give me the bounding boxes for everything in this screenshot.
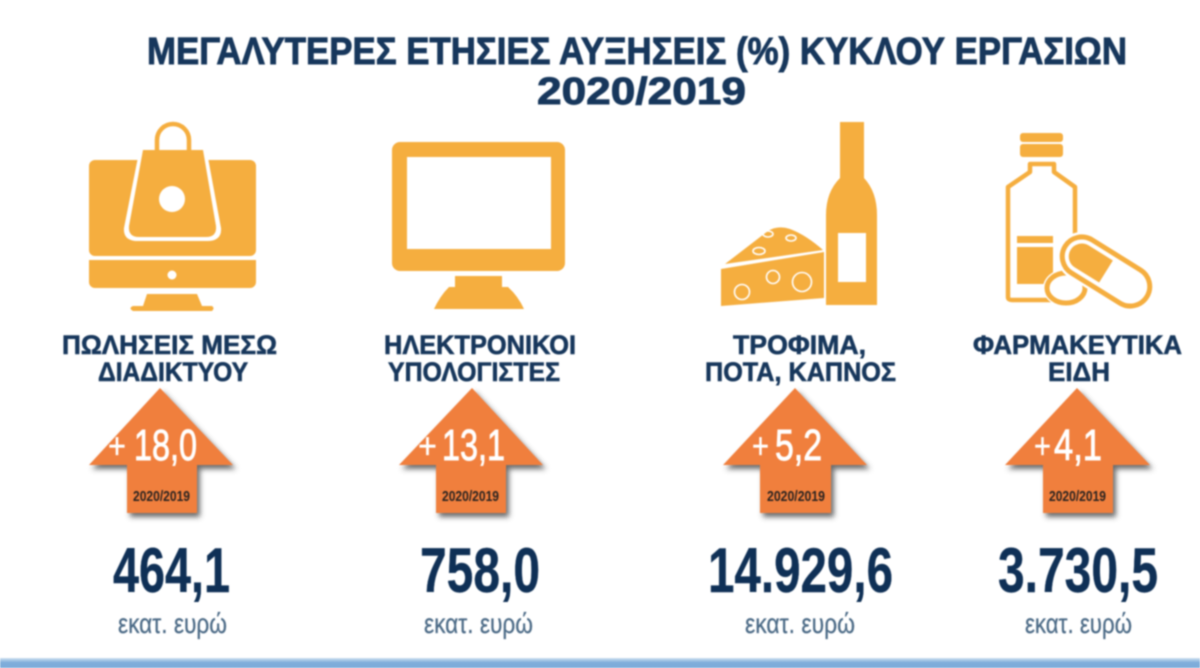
panel: online sales <box>62 124 277 639</box>
bottom blue band <box>0 658 1200 668</box>
arrow: +5,2: 5,2 <box>775 421 822 470</box>
panel: food, drinks, tobacco <box>705 122 896 639</box>
category label: ΕΙΔΗ <box>1048 357 1110 387</box>
icon: monitor with shopping bag <box>89 124 256 311</box>
category label <box>62 330 277 387</box>
unit: εκατ. ευρώ <box>424 608 533 639</box>
arrow: +18,0: 18,0 <box>134 421 197 470</box>
category label: ΤΡΟΦΙΜΑ, <box>733 330 866 360</box>
unit: εκατ. ευρώ <box>118 608 227 639</box>
category label <box>384 330 576 387</box>
arrow: +18,0: + <box>108 425 126 466</box>
arrow: +13,1: 13,1 <box>442 421 505 470</box>
unit: εκατ. ευρώ <box>745 608 855 639</box>
panel: pharmaceuticals <box>973 133 1182 639</box>
category label <box>705 330 896 387</box>
arrow: +5,2: 2020/2019 <box>767 488 825 505</box>
icon: computer monitor <box>392 142 565 309</box>
arrow: +5,2: + <box>752 425 769 466</box>
panel: computers <box>384 142 576 639</box>
arrow: +18,0 <box>89 388 233 513</box>
arrow: +13,1: 2020/2019 <box>442 488 499 505</box>
category label <box>973 330 1182 387</box>
title: 2020/2019 <box>537 71 746 113</box>
category label: ΥΠΟΛΟΓΙΣΤΕΣ <box>388 357 560 387</box>
icon: cheese and bottle <box>721 122 877 306</box>
value: 464,1 <box>113 536 230 606</box>
title: ΜΕΓΑΛΥΤΕΡΕΣ ΕΤΗΣΙΕΣ ΑΥΞΗΣΕΙΣ (%) ΚΥΚΛΟΥ ΕΡΓΑΣΙΩΝ <box>147 31 1127 73</box>
category label: ΠΩΛΗΣΕΙΣ ΜΕΣΩ <box>62 330 277 360</box>
arrow: +4,1: 4,1 <box>1054 421 1102 470</box>
category label: ΦΑΡΜΑΚΕΥΤΙΚΑ <box>973 330 1182 360</box>
arrow: +4,1 <box>1005 388 1150 513</box>
arrow: +4,1: 2020/2019 <box>1049 488 1106 505</box>
arrow: +13,1: + <box>418 425 437 466</box>
value: 14.929,6 <box>708 536 893 606</box>
arrow: +4,1: + <box>1034 425 1051 466</box>
category label: ΔΙΑΔΙΚΤΥΟΥ <box>98 357 248 387</box>
arrow: +5,2 <box>723 388 867 513</box>
arrow: +18,0: 2020/2019 <box>133 488 190 505</box>
title <box>147 31 1127 113</box>
category label: ΗΛΕΚΤΡΟΝΙΚΟΙ <box>384 330 576 360</box>
category label: ΠΟΤΑ, ΚΑΠΝΟΣ <box>705 357 896 387</box>
value: 758,0 <box>420 536 540 606</box>
icon: medicine bottle and pills <box>1008 133 1164 320</box>
arrow: +13,1 <box>399 388 543 513</box>
unit: εκατ. ευρώ <box>1025 608 1132 639</box>
